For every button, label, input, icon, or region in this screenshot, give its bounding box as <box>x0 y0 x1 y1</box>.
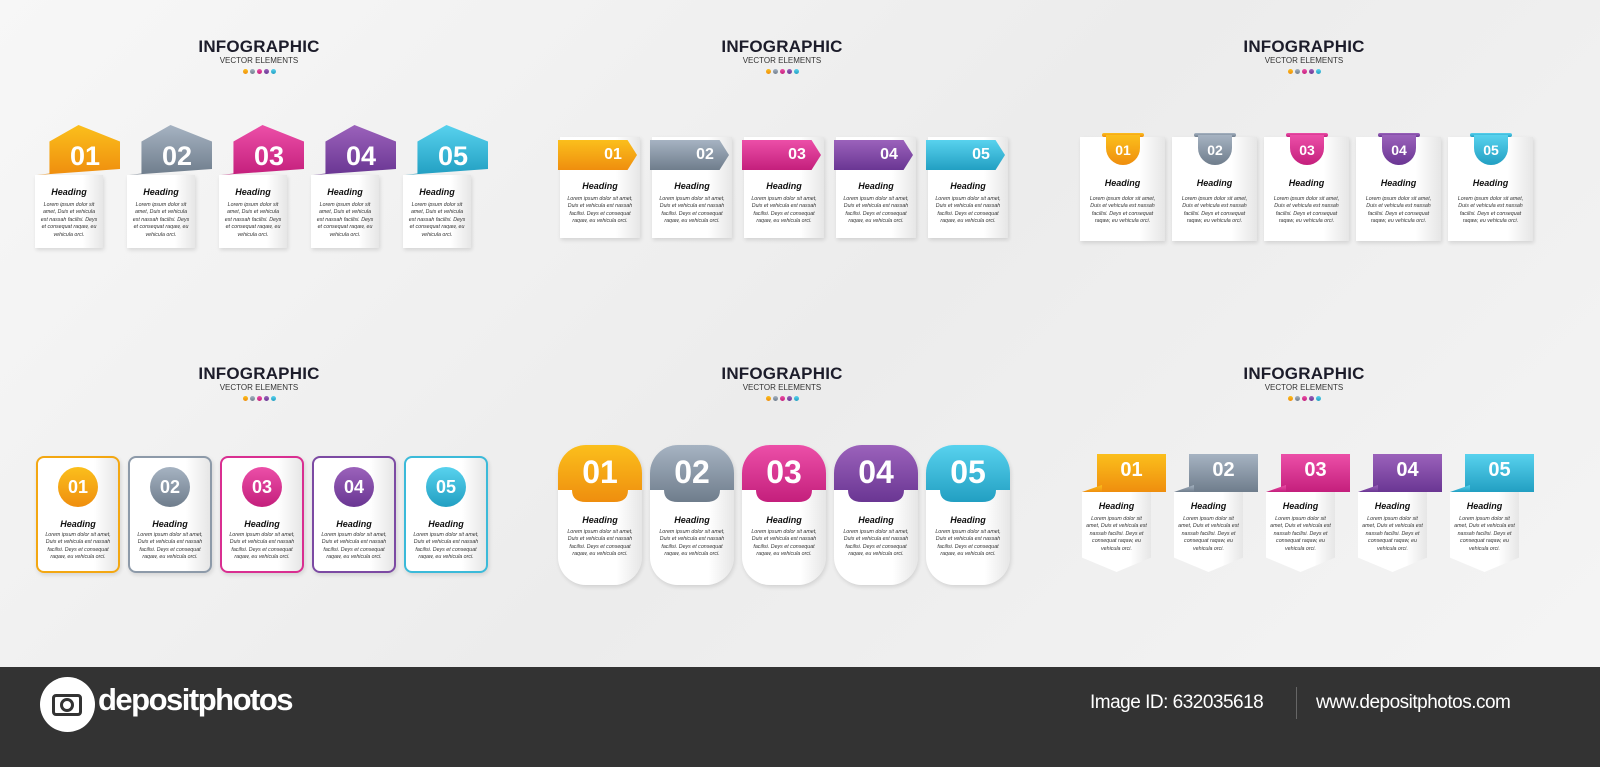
image id: Image ID: 632035618 <box>1090 692 1263 713</box>
title: panel 4: INFOGRAPHIC <box>198 364 320 383</box>
step 02: 02 <box>674 454 710 490</box>
step 03: Heading <box>766 181 802 191</box>
step 02: Heading <box>1191 501 1226 511</box>
step 03: Lorem ipsum dolor sit amet, Duis et vehicula est nassah facilisi. Deys et consequat raqaw, eu vehicula orci. <box>1270 516 1331 552</box>
step 01: Lorem ipsum dolor sit amet, Duis et vehicula est nassah facilisi. Deys et consequat raqaw, eu vehicula orci. <box>567 196 633 224</box>
title: panel 5: INFOGRAPHIC <box>721 364 843 383</box>
step 02: 02 <box>1212 459 1235 481</box>
step 03: 03 <box>1304 459 1327 481</box>
step 03: 03 <box>254 141 284 171</box>
step 02: Heading <box>152 519 188 529</box>
step 05: Lorem ipsum dolor sit amet, Duis et vehicula est nassah facilisi. Deys et consequat raqaw, eu vehicula orci. <box>1454 516 1515 552</box>
title: panel 6 <box>1243 364 1365 401</box>
step 02: 02 <box>1207 142 1223 158</box>
step 05: Heading <box>1473 178 1508 188</box>
step 03: Lorem ipsum dolor sit amet, Duis et vehicula est nassah facilisi. Deys et consequat raqaw, eu vehicula orci. <box>751 196 817 224</box>
step 01: 01 <box>1120 459 1143 481</box>
step 03: 03 <box>1299 142 1315 158</box>
step 05 <box>1448 133 1535 244</box>
step 01: 01 <box>604 146 622 163</box>
step 04 <box>312 456 396 573</box>
step 01: 01 <box>582 454 618 490</box>
step 03: Heading <box>1283 501 1318 511</box>
title: panel 5: VECTOR ELEMENTS <box>743 383 821 392</box>
step 03: Lorem ipsum dolor sit amet, Duis et vehicula est nassah facilisi. Deys et consequat raqaw, eu vehicula orci. <box>229 532 295 560</box>
step 02: Lorem ipsum dolor sit amet, Duis et vehicula est nassah facilisi. Deys et consequat raqaw, eu vehicula orci. <box>133 202 189 238</box>
step 05 <box>1450 454 1534 572</box>
step 04 <box>834 445 918 585</box>
step 04 <box>1358 454 1442 572</box>
step 05: Heading <box>419 187 455 197</box>
step 05: Lorem ipsum dolor sit amet, Duis et vehicula est nassah facilisi. Deys et consequat raqaw, eu vehicula orci. <box>935 529 1001 557</box>
title: panel 5 <box>721 364 843 401</box>
step 03 <box>1266 454 1350 572</box>
step 01: Lorem ipsum dolor sit amet, Duis et vehicula est nassah facilisi. Deys et consequat raqaw, eu vehicula orci. <box>1090 196 1155 224</box>
step 03: Heading <box>235 187 271 197</box>
step 02: Heading <box>1197 178 1232 188</box>
step 02: 02 <box>696 146 714 163</box>
step 05 <box>926 445 1010 585</box>
step 01: Heading <box>60 519 96 529</box>
step 04: Lorem ipsum dolor sit amet, Duis et vehicula est nassah facilisi. Deys et consequat raqaw, eu vehicula orci. <box>1366 196 1431 224</box>
icon: camera logo <box>40 677 95 732</box>
step 01 <box>558 137 642 241</box>
step 05: Heading <box>1467 501 1502 511</box>
title: panel 3: INFOGRAPHIC <box>1243 37 1365 56</box>
step 02: 02 <box>162 141 192 171</box>
panel: folded tabs with pointed cards <box>1082 454 1534 572</box>
step 01 <box>1082 454 1166 572</box>
step 01 <box>1080 133 1167 244</box>
step 01: Heading <box>582 515 618 525</box>
step 02: Heading <box>143 187 179 197</box>
step 03: 03 <box>788 146 806 163</box>
step 05: 05 <box>438 141 468 171</box>
step 04: Lorem ipsum dolor sit amet, Duis et vehicula est nassah facilisi. Deys et consequat raqaw, eu vehicula orci. <box>843 196 909 224</box>
step 02: Lorem ipsum dolor sit amet, Duis et vehicula est nassah facilisi. Deys et consequat raqaw, eu vehicula orci. <box>1178 516 1239 552</box>
step 04: Heading <box>336 519 372 529</box>
title: panel 2: VECTOR ELEMENTS <box>743 56 821 65</box>
step 05 <box>926 137 1010 241</box>
title: panel 4: VECTOR ELEMENTS <box>220 383 298 392</box>
step 01: 01 <box>1115 142 1131 158</box>
step 05: Lorem ipsum dolor sit amet, Duis et vehicula est nassah facilisi. Deys et consequat raqaw, eu vehicula orci. <box>409 202 465 238</box>
title: panel 1 <box>198 37 320 74</box>
title: panel 2: INFOGRAPHIC <box>721 37 843 56</box>
step 05: Heading <box>428 519 464 529</box>
step 05: 05 <box>1488 459 1511 481</box>
step 05: Heading <box>950 515 986 525</box>
step 04: 04 <box>344 477 364 497</box>
step 02: 02 <box>160 477 180 497</box>
step 04: Lorem ipsum dolor sit amet, Duis et vehicula est nassah facilisi. Deys et consequat raqaw, eu vehicula orci. <box>321 532 387 560</box>
step 02 <box>650 137 734 241</box>
step 04 <box>311 125 396 251</box>
title: panel 6: VECTOR ELEMENTS <box>1265 383 1343 392</box>
step 04: 04 <box>346 141 376 171</box>
step 03: Lorem ipsum dolor sit amet, Duis et vehicula est nassah facilisi. Deys et consequat raqaw, eu vehicula orci. <box>1274 196 1339 224</box>
panel: pill cards <box>558 445 1012 588</box>
step 04 <box>834 137 918 241</box>
step 03: Lorem ipsum dolor sit amet, Duis et vehicula est nassah facilisi. Deys et consequat raqaw, eu vehicula orci. <box>225 202 281 238</box>
title: panel 3 <box>1243 37 1365 74</box>
step 05: 05 <box>950 454 986 490</box>
step 01 <box>35 125 120 251</box>
step 03 <box>219 125 304 251</box>
panel: ribbon badges <box>1080 133 1535 244</box>
step 04: Heading <box>858 181 894 191</box>
step 05: Heading <box>950 181 986 191</box>
step 01: Lorem ipsum dolor sit amet, Duis et vehicula est nassah facilisi. Deys et consequat raqaw, eu vehicula orci. <box>567 529 633 557</box>
step 01: Lorem ipsum dolor sit amet, Duis et vehicula est nassah facilisi. Deys et consequat raqaw, eu vehicula orci. <box>1086 516 1147 552</box>
step 02: Heading <box>674 515 710 525</box>
step 03 <box>1264 133 1351 244</box>
step 05: 05 <box>436 477 456 497</box>
step 05: 05 <box>972 146 990 163</box>
title: panel 2 <box>721 37 843 74</box>
step 01 <box>558 445 642 585</box>
website url: www.depositphotos.com <box>1316 692 1510 713</box>
step 03: Heading <box>766 515 802 525</box>
step 05: Lorem ipsum dolor sit amet, Duis et vehicula est nassah facilisi. Deys et consequat raqaw, eu vehicula orci. <box>1458 196 1523 224</box>
step 03 <box>742 445 826 585</box>
step 01: Lorem ipsum dolor sit amet, Duis et vehicula est nassah facilisi. Deys et consequat raqaw, eu vehicula orci. <box>41 202 97 238</box>
step 03: Heading <box>244 519 280 529</box>
step 04: Heading <box>1375 501 1410 511</box>
step 01: Lorem ipsum dolor sit amet, Duis et vehicula est nassah facilisi. Deys et consequat raqaw, eu vehicula orci. <box>45 532 111 560</box>
title: panel 4 <box>198 364 320 401</box>
step 02 <box>650 445 734 585</box>
step 01: 01 <box>68 477 88 497</box>
step 03 <box>220 456 304 573</box>
title: panel 6: INFOGRAPHIC <box>1243 364 1365 383</box>
step 02: Lorem ipsum dolor sit amet, Duis et vehicula est nassah facilisi. Deys et consequat raqaw, eu vehicula orci. <box>1182 196 1247 224</box>
step 04: Heading <box>327 187 363 197</box>
step 01: 01 <box>70 141 100 171</box>
title: panel 1: INFOGRAPHIC <box>198 37 320 56</box>
panel: hexagon tabs <box>35 125 488 251</box>
step 02 <box>128 456 212 573</box>
step 02 <box>127 125 212 251</box>
step 03: 03 <box>766 454 802 490</box>
step 04: Lorem ipsum dolor sit amet, Duis et vehicula est nassah facilisi. Deys et consequat raqaw, eu vehicula orci. <box>1362 516 1423 552</box>
step 01: Heading <box>1105 178 1140 188</box>
step 02: Lorem ipsum dolor sit amet, Duis et vehicula est nassah facilisi. Deys et consequat raqaw, eu vehicula orci. <box>659 529 725 557</box>
step 05: Lorem ipsum dolor sit amet, Duis et vehicula est nassah facilisi. Deys et consequat raqaw, eu vehicula orci. <box>413 532 479 560</box>
step 01: Heading <box>582 181 618 191</box>
step 03: 03 <box>252 477 272 497</box>
step 04: 04 <box>858 454 894 490</box>
step 05 <box>403 125 488 251</box>
step 01 <box>36 456 120 573</box>
panel: outlined rounded cards <box>36 456 490 576</box>
step 04: Lorem ipsum dolor sit amet, Duis et vehicula est nassah facilisi. Deys et consequat raqaw, eu vehicula orci. <box>843 529 909 557</box>
step 05: 05 <box>1483 142 1499 158</box>
step 04: 04 <box>880 146 898 163</box>
step 04: Lorem ipsum dolor sit amet, Duis et vehicula est nassah facilisi. Deys et consequat raqaw, eu vehicula orci. <box>317 202 373 238</box>
step 04 <box>1356 133 1443 244</box>
step 02: Heading <box>674 181 710 191</box>
step 04: Heading <box>858 515 894 525</box>
step 03: Lorem ipsum dolor sit amet, Duis et vehicula est nassah facilisi. Deys et consequat raqaw, eu vehicula orci. <box>751 529 817 557</box>
step 01: Heading <box>51 187 87 197</box>
step 02: Lorem ipsum dolor sit amet, Duis et vehicula est nassah facilisi. Deys et consequat raqaw, eu vehicula orci. <box>659 196 725 224</box>
step 05 <box>404 456 488 573</box>
step 04: 04 <box>1391 142 1407 158</box>
step 04: 04 <box>1396 459 1419 481</box>
step 04: Heading <box>1381 178 1416 188</box>
step 03 <box>742 137 826 241</box>
panel: arrow tabs <box>558 137 1010 241</box>
step 03: Heading <box>1289 178 1324 188</box>
title: panel 3: VECTOR ELEMENTS <box>1265 56 1343 65</box>
step 02 <box>1174 454 1258 572</box>
step 02 <box>1172 133 1259 244</box>
logo text: depositphotos <box>98 682 292 717</box>
title: panel 1: VECTOR ELEMENTS <box>220 56 298 65</box>
step 02: Lorem ipsum dolor sit amet, Duis et vehicula est nassah facilisi. Deys et consequat raqaw, eu vehicula orci. <box>137 532 203 560</box>
footer bar <box>0 667 1600 767</box>
step 01: Heading <box>1099 501 1134 511</box>
step 05: Lorem ipsum dolor sit amet, Duis et vehicula est nassah facilisi. Deys et consequat raqaw, eu vehicula orci. <box>935 196 1001 224</box>
